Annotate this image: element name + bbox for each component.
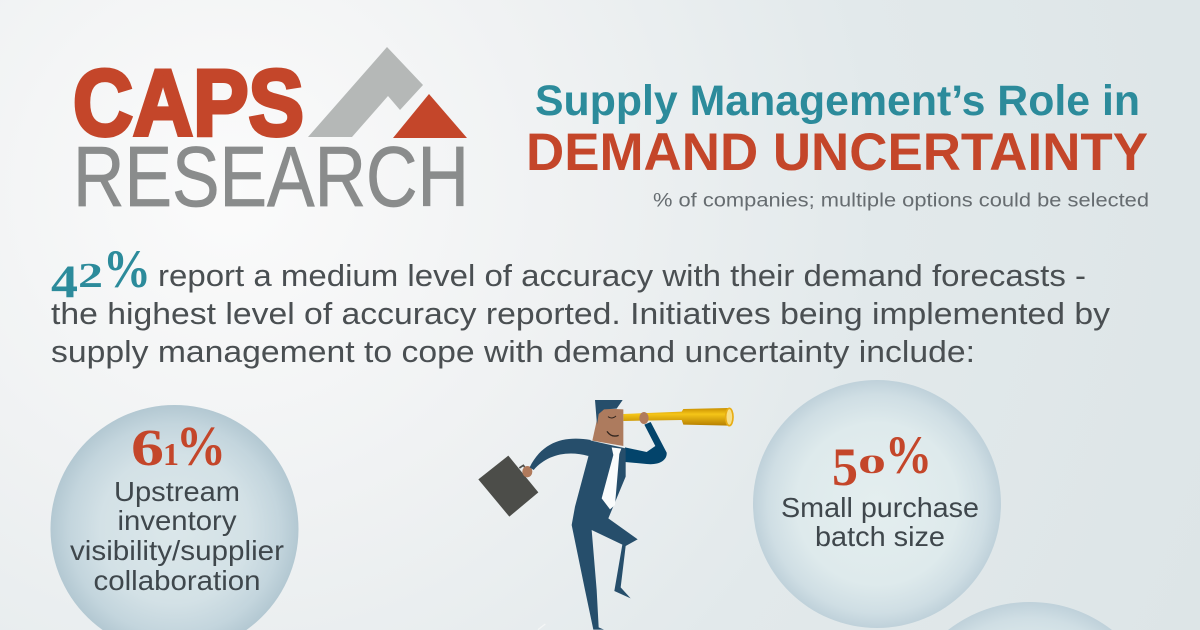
necktie and shirt <box>602 447 621 509</box>
logo word: CAPS: CAPS <box>73 50 304 155</box>
illustration: businessman with telescope <box>478 400 733 630</box>
stat: 42%: % <box>103 239 151 299</box>
intro line 3: supply management to cope with demand uncertainty include: <box>51 334 975 369</box>
bubble label: inventory <box>118 505 236 536</box>
stat: 50%: % <box>885 425 932 485</box>
stat: 42% <box>51 239 151 308</box>
logo word: RESEARCH: RESEARCH <box>73 130 469 225</box>
suit body and legs <box>572 440 638 630</box>
bubble label: collaboration <box>94 565 260 596</box>
stat: 61%: 6 <box>131 420 164 477</box>
logo mountain mark <box>308 47 467 138</box>
bubble label: Small purchase <box>781 492 979 523</box>
stat: 61% <box>131 416 226 478</box>
stat: 61%: % <box>176 416 226 478</box>
bubble label <box>781 492 979 552</box>
intro line 1: report a medium level of accuracy with their demand forecasts - <box>158 258 1086 293</box>
bubble label: batch size <box>815 521 945 552</box>
subtitle note: % of companies; multiple options could be selected <box>653 190 1149 212</box>
briefcase <box>478 456 538 517</box>
bubble: 61% upstream visibility <box>51 405 299 630</box>
stat: 50%: 5 <box>832 437 858 497</box>
bubble: 50% small batch <box>753 380 1001 628</box>
intro paragraph <box>51 239 1111 369</box>
title <box>526 77 1148 182</box>
title line 1: Supply Management’s Role in <box>535 77 1140 125</box>
stat: 50%: 0 <box>858 450 886 479</box>
raised arm <box>625 422 667 464</box>
left arm <box>530 439 591 470</box>
bubble label: visibility/supplier <box>70 535 284 566</box>
bubble: partially visible lower right <box>948 602 1112 630</box>
stat: 42%: 4 <box>51 256 78 308</box>
telescope <box>623 408 733 426</box>
head <box>592 400 623 446</box>
hand on telescope <box>639 412 649 424</box>
bubble label: Upstream <box>114 476 240 507</box>
title line 2: DEMAND UNCERTAINTY <box>526 123 1148 182</box>
logo: CAPS Research <box>73 47 469 225</box>
hand holding briefcase <box>522 466 532 477</box>
stat: 61%: 1 <box>163 436 179 472</box>
faint arrow tip <box>538 624 545 630</box>
intro line 2: the highest level of accuracy reported. Initiatives being implemented by <box>51 296 1111 331</box>
stat: 50% <box>832 425 932 497</box>
stat: 42%: 2 <box>78 256 103 295</box>
bubble label <box>70 476 284 596</box>
